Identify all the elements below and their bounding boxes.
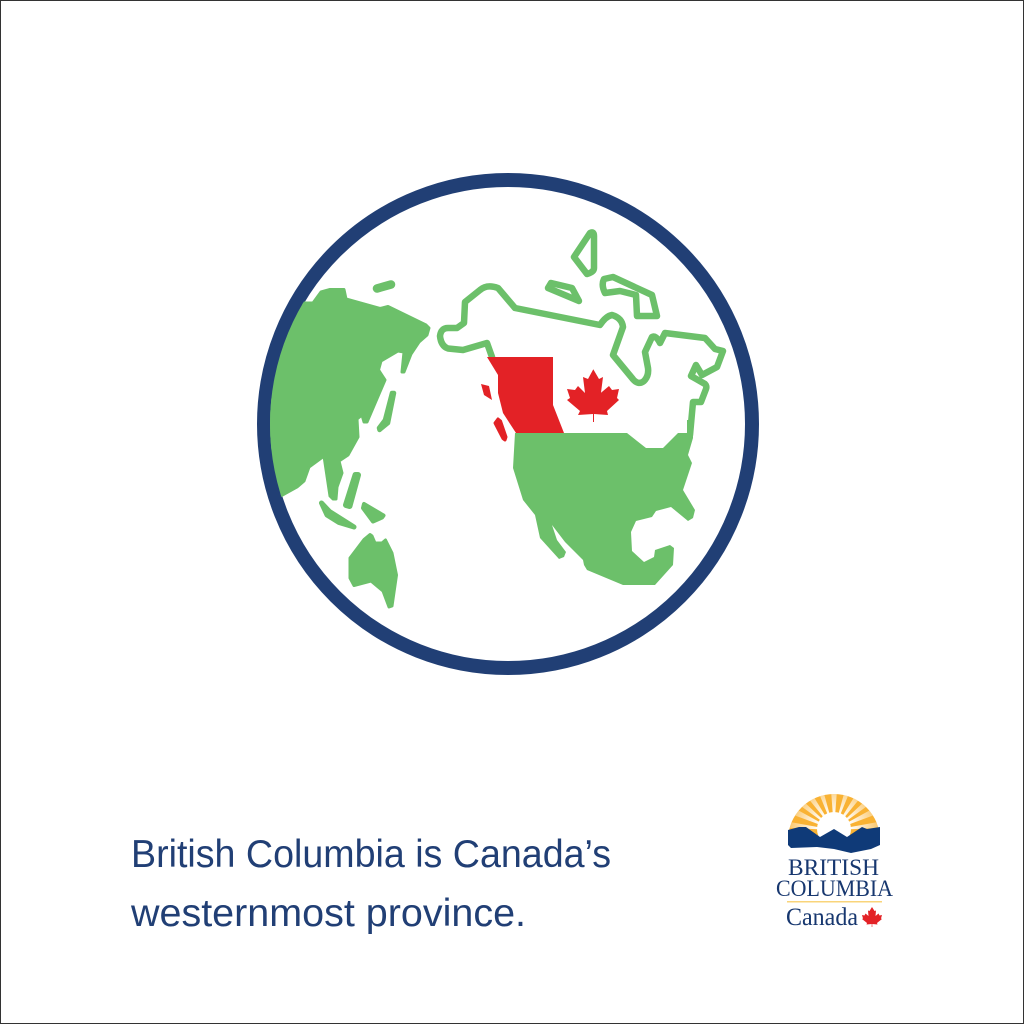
red island: Vancouver Island [495, 419, 506, 440]
logo: white sun glow [817, 812, 851, 846]
logo: sun rays [790, 794, 878, 830]
logo: wordmark Columbia: COLUMBIA [776, 876, 893, 902]
Canada outline [440, 286, 723, 435]
landmass: USA and Mexico [513, 420, 695, 585]
maple leaf [567, 369, 619, 422]
logo: sun dome [788, 794, 880, 840]
caption [130, 833, 611, 935]
globe illustration [264, 180, 752, 668]
logo: small maple leaf [862, 907, 882, 927]
landmass: Asia [270, 290, 429, 502]
red island: Haida Gwaii [481, 384, 492, 400]
logo: navy mountains [788, 827, 880, 853]
island: Indonesia arc [322, 503, 354, 527]
caption line 2: westernmost province. [130, 892, 526, 935]
caption line 1: British Columbia is Canada’s [131, 833, 611, 876]
logo: wordmark Canada: Canada [786, 904, 858, 931]
logo: gold divider [787, 901, 882, 902]
landmass: Australia [350, 534, 396, 607]
island: Japan [379, 393, 394, 430]
globe ring [264, 180, 752, 668]
British Columbia Canada logo [776, 790, 893, 931]
British Columbia in red [487, 357, 564, 433]
island: New Guinea [363, 504, 384, 522]
arctic island: Victoria [548, 283, 579, 301]
arctic island: Baffin [574, 232, 594, 274]
arctic island: Ellesmere [603, 277, 657, 316]
logo: wordmark British: BRITISH [788, 855, 879, 881]
island: Sakhalin [377, 284, 391, 288]
island: Philippines [346, 475, 358, 506]
